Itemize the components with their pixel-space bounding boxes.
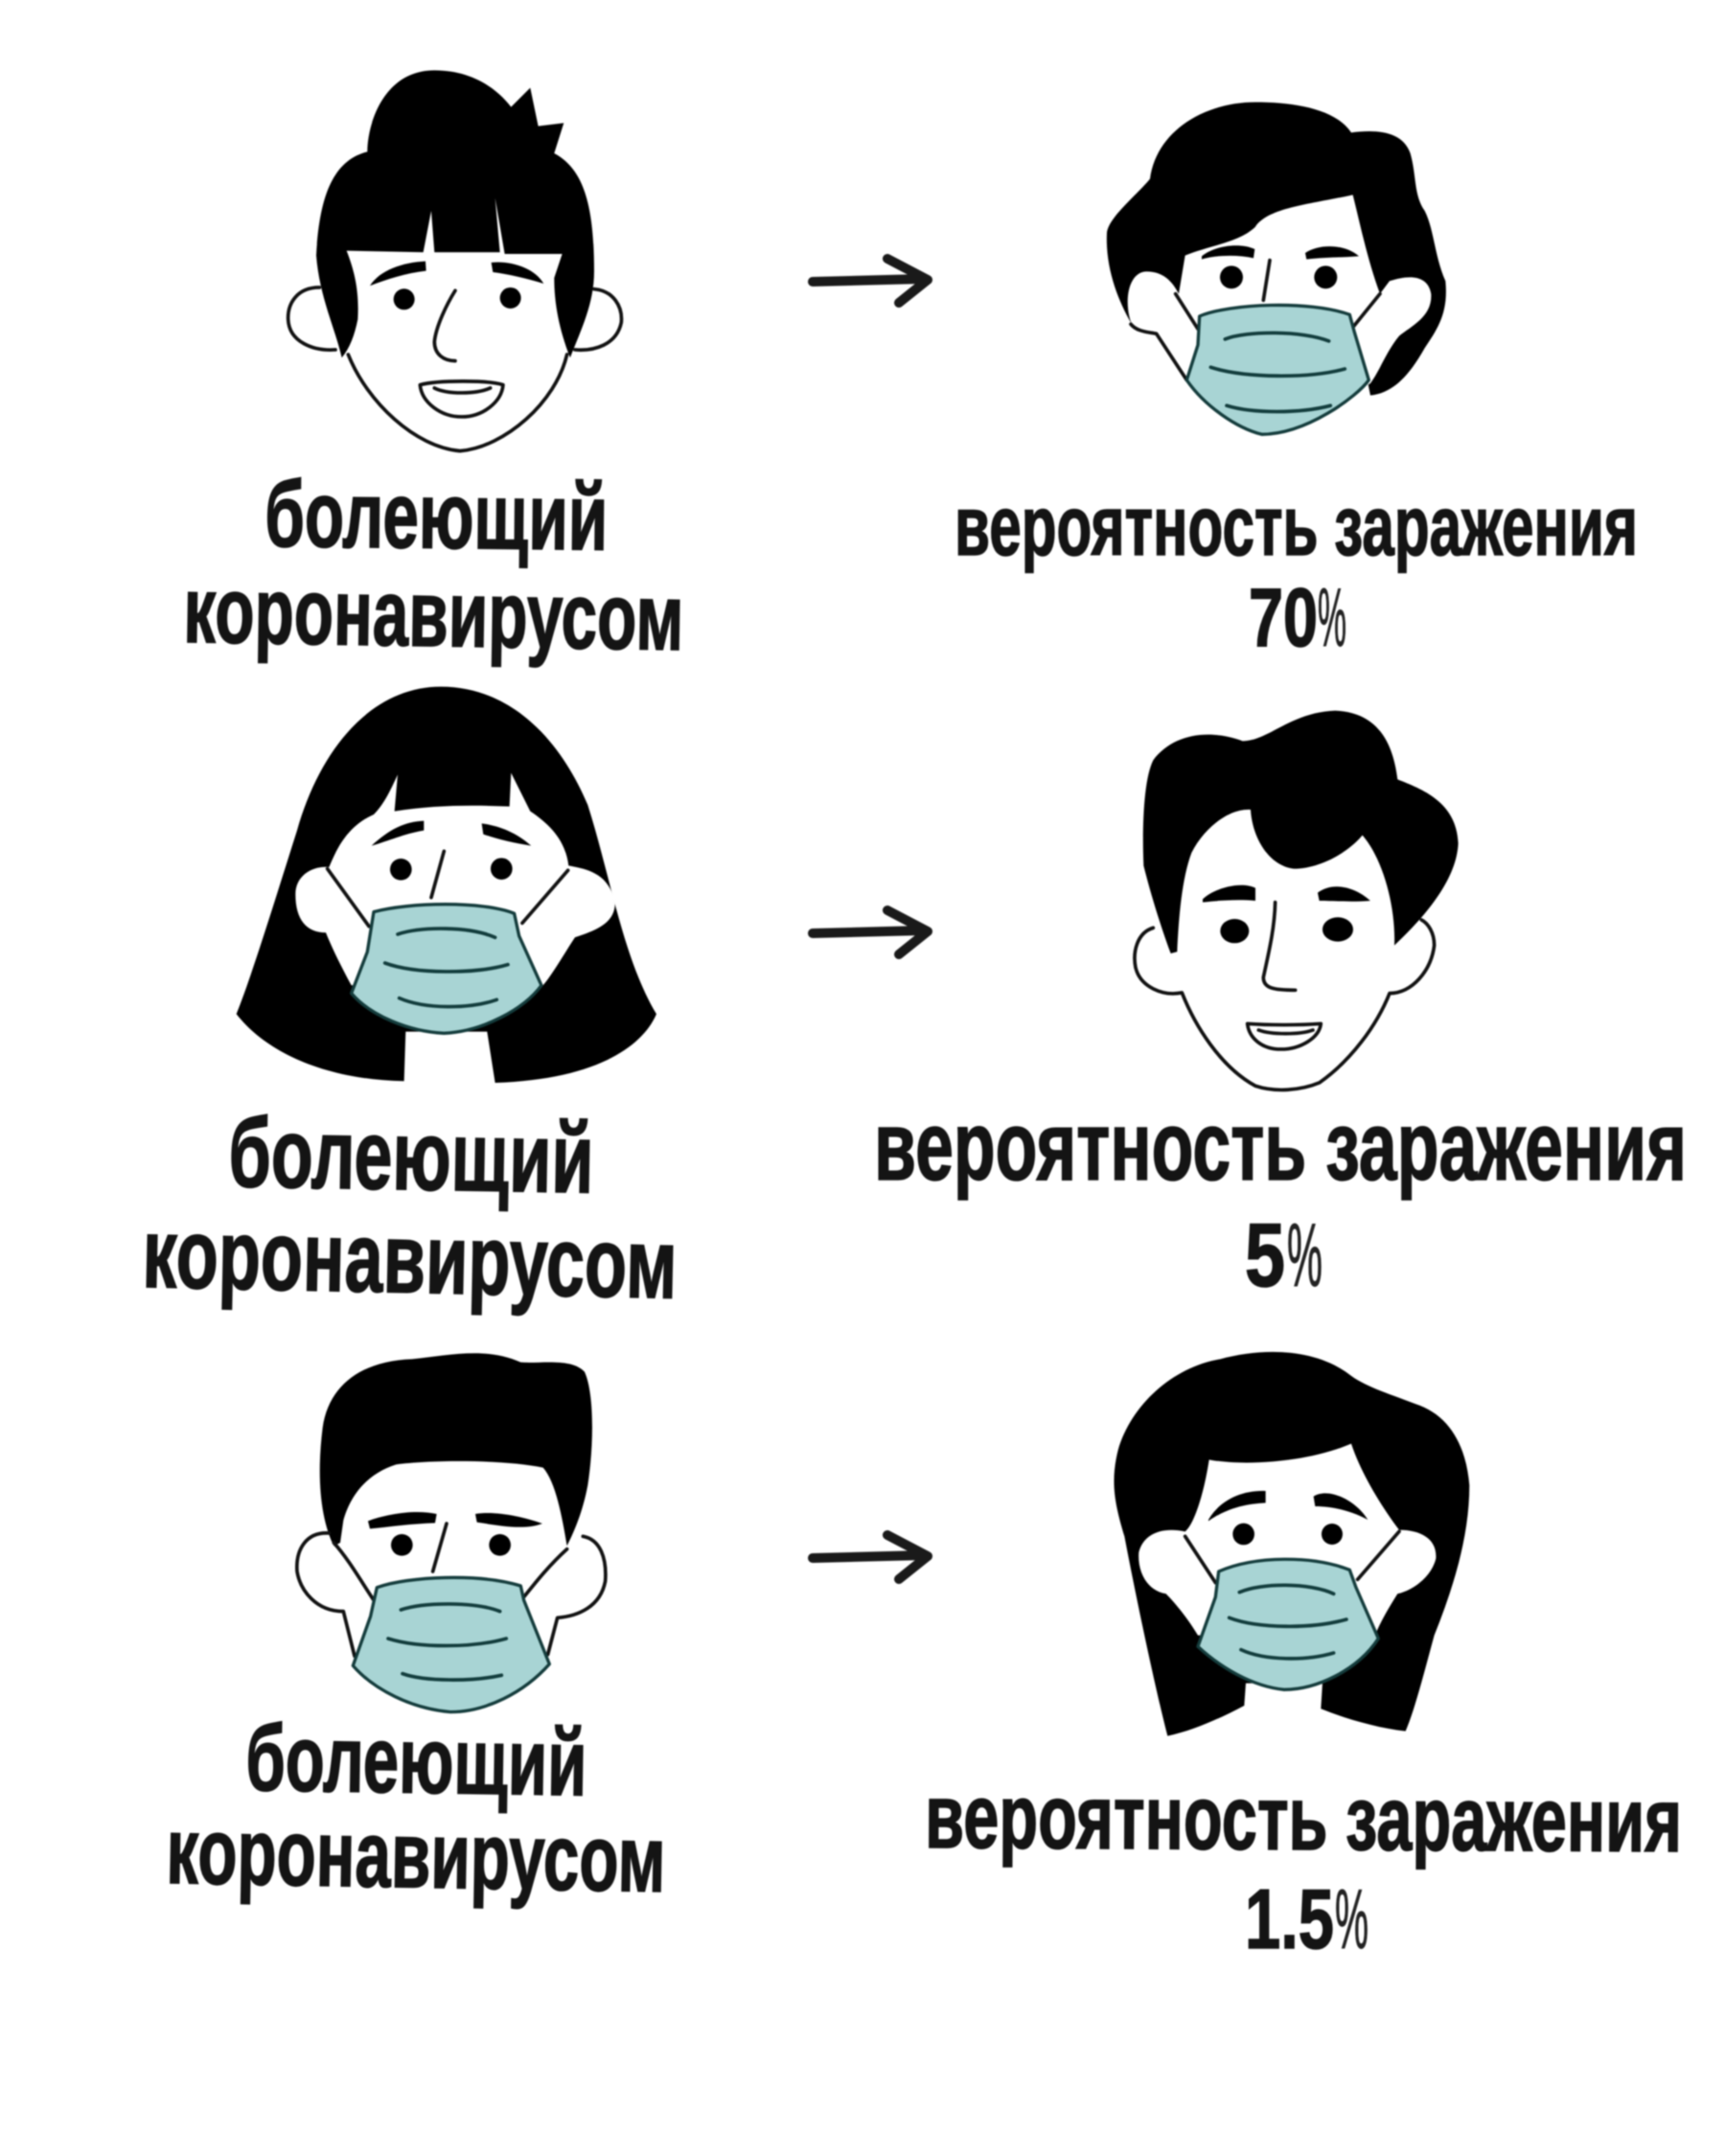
icon: man with short hair wearing mask [297, 1353, 606, 1712]
label: infection probability row 3: 1.5 [1245, 1871, 1334, 1966]
arrow row 2 [813, 910, 928, 954]
icon: woman with shoulder-length hair wearing mask [1114, 1352, 1469, 1736]
label: sick person row 3: коронавирусом [166, 1798, 666, 1912]
label: infection probability row 1 [954, 478, 1638, 664]
label: infection probability row 3 [925, 1766, 1682, 1966]
label: infection probability row 2: % [1287, 1204, 1322, 1305]
label: sick person row 1: коронавирусом [183, 557, 684, 670]
arrow row 3 [813, 1535, 928, 1579]
label: sick person row 3 [166, 1705, 666, 1912]
label: infection probability row 3: % [1335, 1871, 1368, 1966]
arrow row 1 [813, 259, 928, 303]
label: sick person row 2: коронавирусом [142, 1198, 678, 1319]
label: infection probability row 1: % [1318, 572, 1346, 664]
label: sick person row 1: болеющий [264, 461, 609, 570]
icon: woman with long hair wearing mask [237, 687, 656, 1083]
label: sick person row 2: болеющий [228, 1097, 595, 1214]
label: infection probability row 2: 5 [1245, 1204, 1285, 1305]
icon: man with wavy hair wearing mask [1107, 103, 1446, 434]
label: sick person row 1 [183, 461, 684, 670]
icon: sick woman with bun, no mask [288, 70, 621, 451]
label: sick person row 3: болеющий [245, 1705, 587, 1816]
label: infection probability row 2 [874, 1091, 1687, 1305]
icon: man with wavy hair, no mask [1135, 711, 1459, 1089]
label: sick person row 2 [142, 1097, 678, 1319]
label: infection probability row 1: 70 [1249, 572, 1318, 664]
